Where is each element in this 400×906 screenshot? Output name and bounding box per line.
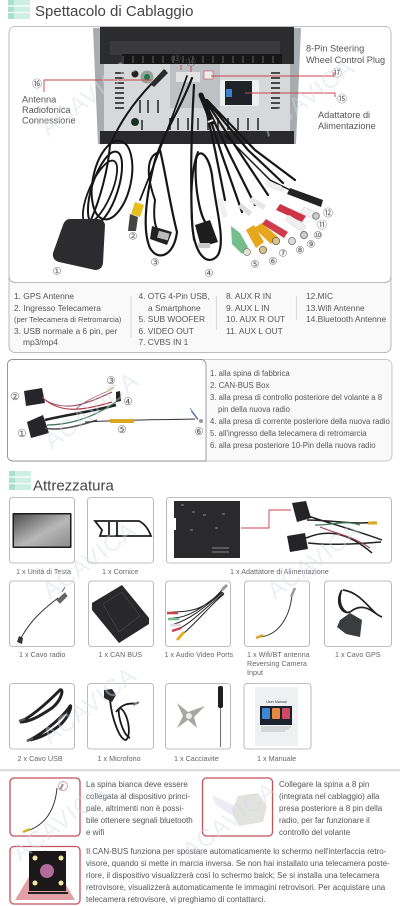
harness legend: 3. alla presa di controllo posteriore del volante a 8 [210, 393, 382, 402]
panel: wiring diagram [9, 26, 391, 352]
tile: GPS cable [324, 581, 392, 646]
legend column 2: 4. OTG 4-Pin USB, [138, 291, 210, 301]
GPS antenna puck [53, 219, 105, 270]
harness number labels: ② [10, 391, 20, 403]
harness number labels: ④ [123, 396, 133, 408]
icon: equipment heading list [9, 471, 31, 490]
number labels on wiring diagram: ⑩ [314, 230, 323, 242]
note text: white plug [86, 780, 193, 837]
legend column 4: 12.MIC [306, 291, 333, 301]
icon: wiring heading list [8, 0, 30, 19]
watermarks: ACAVICA [37, 662, 142, 750]
harness legend: 5. all'ingresso della telecamera di retromarcia [210, 429, 367, 438]
caption: GPS cable: 1 x Cavo GPS [335, 650, 381, 659]
note image: reversing camera [10, 846, 80, 904]
tile: microphone [88, 684, 154, 749]
legend column 1: 3. USB normale a 6 pin, per [14, 326, 118, 336]
tile: screwdriver [166, 684, 230, 749]
note text: CAN-BUS: telecamera retrovisore, vi preghiamo di contattarci. [86, 895, 266, 904]
radio rear photo [93, 27, 301, 144]
legend column 2 [138, 291, 210, 347]
label: antenna connection: Connessione [22, 116, 76, 126]
note text: white plug: bile ottenere segnali bluetooth [86, 816, 193, 825]
label: antenna connection: Radiofonica [22, 105, 71, 115]
label: power adapter [318, 110, 376, 131]
caption: power adapter: 1 x Adattatore di Alimentazione [230, 567, 329, 576]
note image: antenna plug [10, 778, 80, 836]
legend column 2: 7. CVBS IN 1 [138, 337, 189, 347]
note text: CAN-BUS: visore, quando si mette in marcia inversa. Se non hai installato una telecamera poste- [86, 859, 390, 868]
watermarks: ACAVICA [35, 54, 140, 142]
legend column 2: 5. SUB WOOFER [138, 314, 205, 324]
legend column 1: (per Telecamera di Retromarcia) [14, 315, 122, 324]
legend column 3 [226, 291, 285, 336]
watermarks: ACAVICA [177, 777, 282, 865]
number labels on wiring diagram: ⑯ [32, 78, 42, 90]
number labels on wiring diagram: ④ [205, 268, 214, 280]
caption: USB cables: 2 x Cavo USB [18, 754, 63, 763]
caption: head unit: 1 x Unità di Testa [16, 567, 71, 576]
caption: audio video ports: 1 x Audio Video Ports [164, 650, 233, 659]
caption: wifi BT antenna: Input [247, 668, 263, 677]
number labels on wiring diagram: ⑥ [269, 256, 278, 268]
note text: 8-pin plug: presa posteriore a 8 pin della [279, 804, 383, 813]
number labels on wiring diagram [32, 54, 347, 280]
cables: USB [146, 78, 192, 255]
harness number labels: ⑤ [117, 424, 127, 436]
red plugs [262, 219, 288, 238]
tile: radio cable [10, 581, 74, 646]
number labels on wiring diagram: ⑦ [279, 248, 288, 260]
legend column 3: 11. AUX L OUT [226, 326, 283, 336]
harness number labels: ③ [106, 375, 116, 387]
yellow plugs [246, 225, 264, 248]
legend column 1: 2. Ingresso Telecamera [14, 303, 101, 313]
red callout leaders [44, 65, 335, 97]
number labels on wiring diagram: ⑨ [307, 240, 316, 250]
tile: manual [244, 684, 311, 749]
watermarks: ACAVICA [39, 367, 144, 455]
number labels on wiring diagram: ① [53, 266, 62, 278]
legend column 4: 14.Bluetooth Antenne [306, 314, 386, 324]
tile: manual: User Manual [266, 700, 287, 704]
tile: CAN BUS [88, 581, 154, 646]
tile: wifi BT antenna [244, 581, 310, 646]
legend column 3: 9. AUX L IN [226, 303, 269, 313]
note text: 8-pin plug: (integrata nel cablaggio) alla [279, 792, 380, 801]
label: steering wheel plug: 8-Pin Steering [306, 44, 364, 54]
cables: camera input [128, 76, 187, 231]
title: Spettacolo di Cablaggio: Spettacolo di Cablaggio [35, 3, 193, 20]
note text: CAN-BUS [86, 847, 390, 904]
legend column 4: 13.Wifi Antenne [306, 303, 365, 313]
white plugs [285, 215, 306, 232]
cables: HDMI style video [191, 85, 221, 260]
note text: CAN-BUS: riore, il dispositivo visualizzerà così lo schermo balck; Se si installa una telecamera [86, 871, 380, 880]
number labels on wiring diagram: ⑭ [186, 56, 196, 68]
number labels on wiring diagram: ⑫ [323, 208, 333, 220]
legend column 4 [306, 291, 386, 324]
caption: wifi BT antenna [247, 650, 310, 677]
number labels on wiring diagram: ⑬ [171, 54, 181, 66]
caption: CAN BUS: 1 x CAN BUS [98, 650, 142, 659]
legend column 3: 8. AUX R IN [226, 291, 271, 301]
caption: wifi BT antenna: Reversing Camera [247, 659, 307, 668]
harness number labels [10, 375, 204, 440]
legend column 1: mp3/mp4 [23, 337, 58, 347]
harness legend: 4. alla presa di corrente posteriore della nuova radio [210, 417, 391, 426]
legend column 2: a Smartphone [148, 303, 201, 313]
watermarks: ACAVICA [255, 54, 360, 142]
green plug [231, 226, 248, 254]
note text: CAN-BUS: retrovisore, visualizzerà automaticamente le immagini retrovisori. Per acquistare una [86, 883, 386, 892]
note text: white plug: pale, altrimenti non è possi- [86, 804, 184, 813]
note text: 8-pin plug: controllo del volante [279, 828, 351, 837]
number labels on wiring diagram: ⑤ [251, 260, 260, 270]
tile: audio video ports [166, 581, 230, 646]
tile: USB cables [10, 684, 74, 749]
caption: wifi BT antenna: 1 x Wifi/BT antenna [247, 650, 310, 659]
number labels on wiring diagram: ⑰ [332, 68, 342, 80]
number labels on wiring diagram: ② [129, 232, 138, 242]
legend column 2: 6. VIDEO OUT [138, 326, 194, 336]
label: steering wheel plug [306, 44, 385, 65]
note text: white plug: collegata al dispositivo princi- [86, 792, 190, 801]
legend column 1 [14, 291, 122, 347]
watermarks: ACAVICA [37, 517, 142, 605]
number labels on wiring diagram: ⑧ [296, 246, 305, 256]
harness illustration [24, 387, 203, 438]
mic plug [225, 135, 290, 190]
number labels on wiring diagram: ⑮ [337, 94, 347, 106]
caption: frame: 1 x Cornice [102, 567, 138, 576]
note text: 8-pin plug: Collegare la spina a 8 pin [279, 780, 369, 789]
harness legend: 1. alla spina di fabbrica [210, 369, 290, 378]
caption: screwdriver: 1 x Cacciavite [174, 754, 219, 763]
harness legend: pin della nuova radio [218, 405, 291, 414]
harness legend: 6. alla presa posteriore 10-Pin della nuova radio [210, 441, 376, 450]
note text: CAN-BUS: Il CAN-BUS funziona per spostare automaticamente lo schermo nell'interfaccia retro- [86, 847, 387, 856]
tile: head unit [10, 498, 74, 563]
cables: antenna and GPS [53, 69, 168, 270]
title: Attrezzatura: Attrezzatura [33, 478, 115, 494]
tile: power adapter [166, 498, 392, 563]
caption: radio cable: 1 x Cavo radio [19, 650, 65, 659]
tile: frame [88, 498, 154, 563]
label: power adapter: Alimentazione [318, 121, 376, 131]
harness legend [210, 369, 391, 450]
caption: microphone: 1 x Microfono [98, 754, 141, 763]
panel: harness [8, 360, 392, 461]
label: antenna connection [22, 94, 76, 126]
watermarks: ACAVICA [7, 779, 112, 867]
legend column 3: 10. AUX R OUT [226, 314, 285, 324]
note text: white plug: e wifi [86, 828, 104, 837]
caption: manual: 1 x Manuale [257, 754, 296, 763]
label: steering wheel plug: Wheel Control Plug [306, 55, 385, 65]
number labels on wiring diagram: ③ [151, 258, 160, 268]
label: power adapter: Adattatore di [318, 110, 370, 120]
note text: white plug: La spina bianca deve essere [86, 780, 188, 789]
harness legend: 2. CAN-BUS Box [210, 381, 269, 390]
legend column 1: 1. GPS Antenne [14, 291, 74, 301]
harness number labels: ① [17, 428, 27, 440]
number labels on wiring diagram: ⑪ [317, 220, 327, 232]
watermarks: ACAVICA [262, 517, 367, 605]
note text: 8-pin plug: radio, per far funzionare il [279, 816, 370, 825]
cables: RCA bundle [201, 95, 323, 256]
note image: 8-pin connector [202, 778, 272, 836]
note text: 8-pin plug [279, 780, 383, 837]
label: antenna connection: Antenna [22, 94, 57, 104]
harness number labels: ⑥ [194, 426, 204, 438]
